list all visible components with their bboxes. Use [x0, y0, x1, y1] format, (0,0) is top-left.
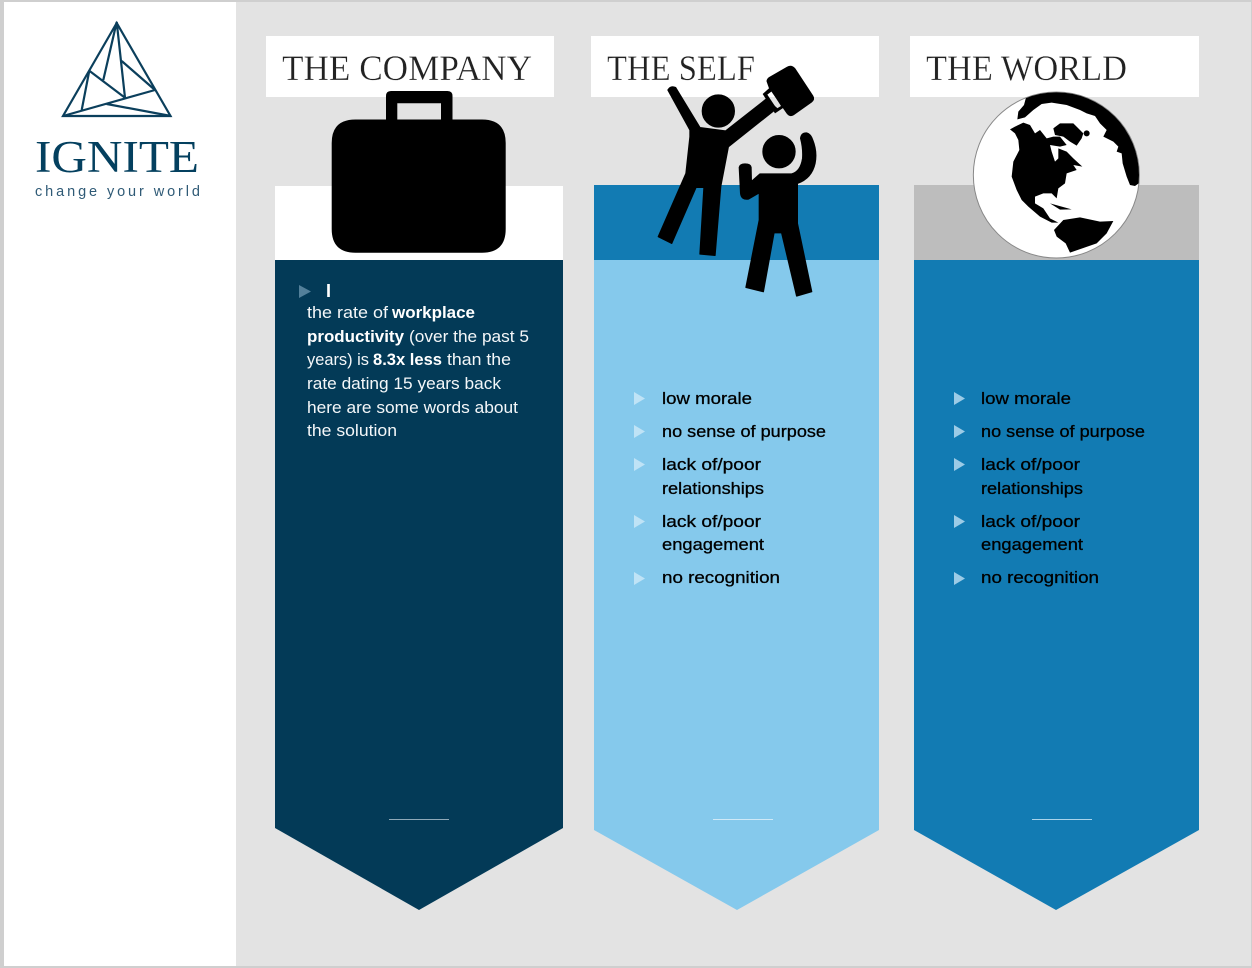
bullet list: the world: no sense of purpose	[981, 422, 1145, 441]
body text: workplace productivity: 8.3x less	[373, 350, 442, 369]
body text: workplace productivity: I	[326, 281, 331, 301]
bullet list: the self: lack of/poor	[662, 455, 761, 474]
bullet list: the self: no recognition	[662, 568, 780, 587]
heading box: the self	[591, 36, 879, 97]
bullet list: the self	[634, 389, 826, 587]
bullet list: the world: engagement	[981, 535, 1083, 554]
header band	[275, 186, 563, 260]
body text: workplace productivity: the solution	[307, 421, 397, 440]
arrow banner body	[594, 260, 879, 910]
bullet list: the self: engagement	[662, 535, 764, 554]
body text: workplace productivity: here are some words about	[307, 398, 518, 417]
logo tagline: change your world	[35, 184, 200, 200]
logo wordmark: IGNITE	[35, 132, 199, 182]
body text: workplace productivity: (over the past 5	[409, 327, 529, 346]
sidebar panel	[4, 2, 236, 966]
panel: the company	[266, 36, 563, 910]
icon: globe	[972, 92, 1140, 258]
heading box: the company: THE COMPANY	[282, 48, 532, 88]
bullet list: the world: low morale	[981, 389, 1071, 408]
logo icon: faceted triangle	[63, 22, 171, 116]
arrow banner body	[914, 260, 1199, 910]
body text: workplace productivity: productivity	[307, 327, 405, 346]
bullet list: the world: lack of/poor	[981, 512, 1080, 531]
bullet list: the world: relationships	[981, 479, 1083, 498]
body text: workplace productivity: than the	[447, 350, 511, 369]
icon: two celebrating people with briefcase	[658, 66, 816, 296]
body text: workplace productivity: the rate of	[307, 303, 388, 322]
heading box: the world	[910, 36, 1199, 97]
body text: workplace productivity: workplace	[391, 303, 475, 322]
bullet list: the self: low morale	[662, 389, 752, 408]
panel: the world	[910, 36, 1199, 910]
body text: workplace productivity	[299, 281, 529, 440]
bullet list: the world	[954, 389, 1145, 587]
heading box: the company	[266, 36, 554, 97]
body text: workplace productivity: years) is	[307, 350, 369, 369]
arrow banner body	[275, 260, 563, 910]
body text: workplace productivity: rate dating 15 years back	[307, 374, 501, 393]
panel: the self	[591, 36, 879, 910]
icon: briefcase	[332, 91, 506, 253]
bullet list: the self: relationships	[662, 479, 764, 498]
bullet	[299, 285, 311, 298]
header band	[594, 185, 879, 260]
bullet list: the self: lack of/poor	[662, 512, 761, 531]
bullet list: the world: lack of/poor	[981, 455, 1080, 474]
bullet list: the world: no recognition	[981, 568, 1099, 587]
header band	[914, 185, 1199, 260]
heading box: the self: THE SELF	[607, 48, 755, 88]
bullet list: the self: no sense of purpose	[662, 422, 826, 441]
heading box: the world: THE WORLD	[926, 48, 1127, 88]
